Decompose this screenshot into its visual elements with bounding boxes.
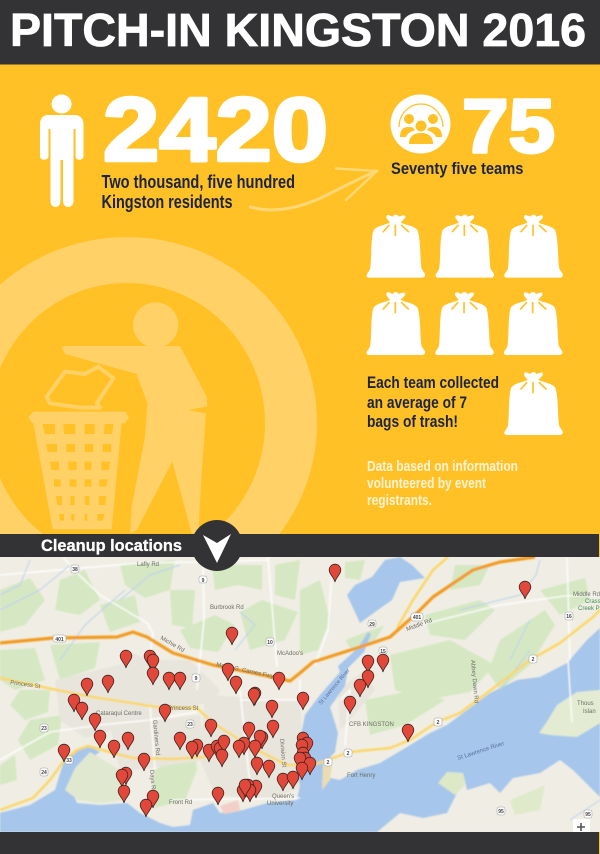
- text: average bags: Each team collected: [367, 373, 499, 392]
- highway shields: 2: [532, 657, 535, 663]
- highway shields: 401: [55, 637, 64, 643]
- stat: 75: 75: [462, 84, 555, 170]
- highway shields: 9: [195, 676, 198, 682]
- text: average bags: an average of 7: [367, 393, 467, 412]
- map labels: Division St: [278, 739, 286, 768]
- highway shields: 38: [72, 567, 78, 573]
- water: [0, 628, 600, 832]
- map labels: University: [267, 801, 293, 807]
- map labels: Islan: [583, 709, 596, 715]
- map labels: Creek P: [578, 606, 600, 612]
- highway shields: 95: [585, 812, 591, 818]
- map labels: CFB KINGSTON: [349, 722, 394, 728]
- title banner: PITCH-IN KINGSTON 2016: [10, 4, 586, 56]
- icon: person: [40, 94, 84, 207]
- lake: [347, 557, 425, 623]
- highway shields: 9: [202, 578, 205, 584]
- highway shields: 23: [187, 722, 193, 728]
- icon: team circle: [390, 94, 450, 154]
- text: residents caption: Two thousand, five hundred: [102, 172, 295, 192]
- text: teams caption: Seventy five teams: [391, 159, 524, 178]
- text: data note: [367, 459, 518, 509]
- icon: seventh trash bag: [504, 372, 563, 435]
- highway shields: 33: [66, 758, 72, 764]
- highway shields: 29: [369, 622, 375, 628]
- yellow roads: [0, 557, 600, 810]
- icon: tidy man watermark: [0, 237, 317, 534]
- map labels: St Lawrence River: [318, 668, 352, 706]
- text: data note: Data based on information: [367, 459, 518, 475]
- highway shields: 10: [267, 640, 273, 646]
- map labels: Princess St: [10, 680, 41, 690]
- map of Kingston: [0, 557, 600, 833]
- map labels: Days Rd: [148, 770, 156, 793]
- thousand islands land: [539, 690, 600, 737]
- white roads: [0, 557, 600, 800]
- stat: 2420: 2420: [103, 80, 328, 180]
- map labels: [10, 562, 600, 807]
- highway shields: 401: [413, 615, 421, 621]
- streams: [0, 560, 600, 820]
- map labels: Michie Rd: [159, 636, 185, 654]
- icon group: six trash bags: [367, 215, 563, 355]
- map labels: Burbrook Rd: [210, 605, 244, 611]
- map labels: Middle Rd: [406, 618, 433, 633]
- cleanup locations bar: [0, 534, 599, 557]
- highway shields: 2: [347, 751, 350, 757]
- highway shields: 16: [566, 614, 572, 620]
- map labels: Lafly Rd: [137, 562, 159, 568]
- map labels: St Lawrence River: [457, 741, 505, 762]
- highway shields: 2: [437, 720, 440, 726]
- icon: down arrow badge: [192, 520, 242, 571]
- text: residents caption: [102, 172, 295, 212]
- text: data note: volunteered by event: [367, 476, 486, 492]
- highway shields: 2: [327, 760, 330, 766]
- map labels: Abbey Dawn Rd: [469, 660, 479, 703]
- footer bar: [0, 832, 599, 854]
- map labels: Cataraqui Centre: [96, 711, 142, 717]
- map labels: Martin G. Carnes Fwy: [216, 662, 274, 680]
- location pins: [58, 564, 531, 817]
- arrow: [250, 168, 377, 210]
- highway shields: [40, 565, 592, 818]
- map labels: Front Rd: [169, 800, 192, 806]
- highway 401: [0, 557, 535, 681]
- map labels: Princess St: [168, 706, 199, 712]
- map labels: Queen's: [272, 794, 294, 800]
- map labels: Thous: [577, 701, 594, 707]
- text: average bags: bags of trash!: [367, 412, 458, 431]
- highway shields: 24: [41, 770, 47, 776]
- text: average bags: [367, 373, 499, 431]
- text: data note: registrants.: [367, 493, 432, 509]
- highway shields: 23: [41, 726, 47, 732]
- map zoom button: [573, 819, 590, 833]
- yellow background panel: [0, 64, 600, 534]
- cleanup locations bar: Cleanup locations: [41, 536, 182, 555]
- map labels: McAdoo's: [277, 651, 303, 657]
- map labels: Middle Rd: [573, 592, 600, 598]
- text: residents caption: Kingston residents: [102, 192, 232, 212]
- map labels: Fort Henry: [347, 773, 375, 779]
- map labels: Gardiners Rd: [151, 720, 160, 756]
- highway shields: 95: [498, 809, 504, 815]
- highway shields: 15: [380, 649, 386, 655]
